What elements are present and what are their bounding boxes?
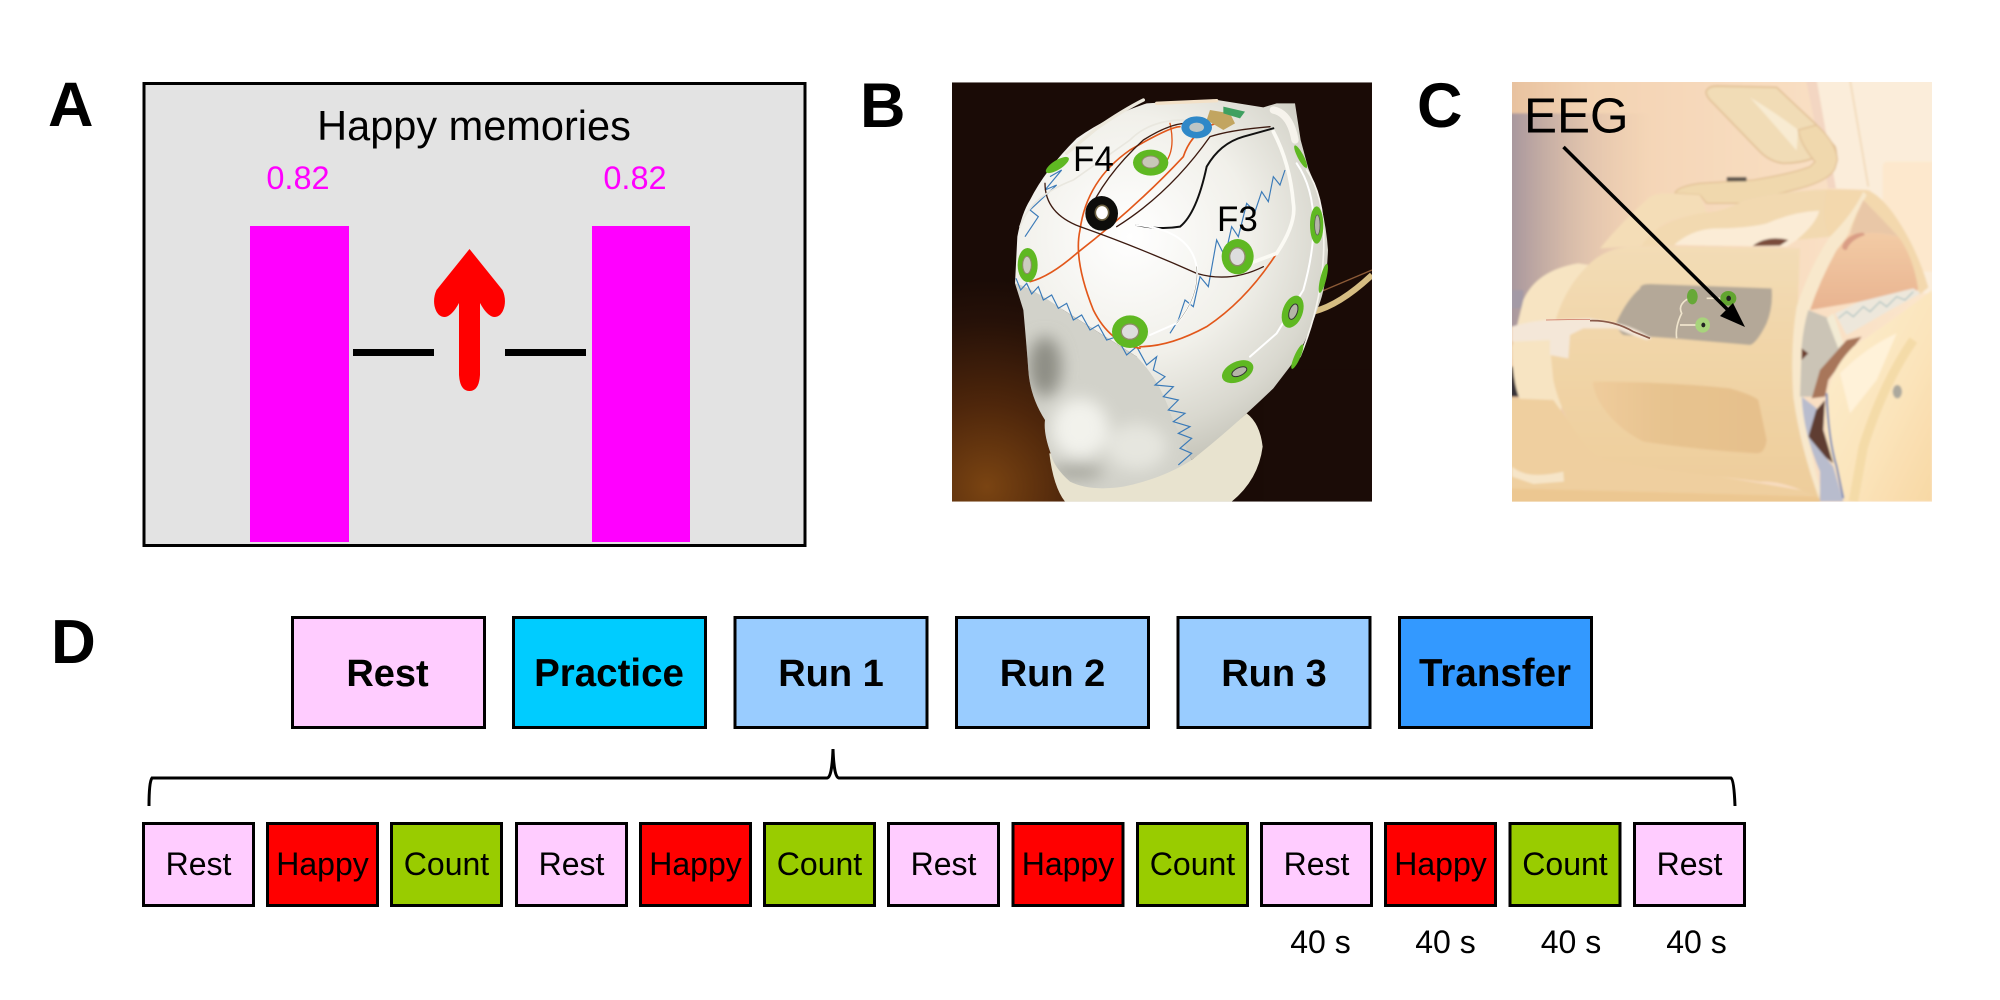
block: Count — [392, 824, 502, 906]
block: Happy — [1013, 824, 1123, 906]
cap — [1015, 99, 1328, 460]
panel C: participant in MR head coil photo illustration — [1500, 80, 1940, 507]
right bar — [592, 226, 690, 542]
eeg wires — [1676, 297, 1723, 338]
box: Rest: Rest — [346, 653, 429, 695]
left baseline dash — [353, 349, 434, 356]
foam stand — [1049, 413, 1263, 502]
box: Run 2 — [956, 618, 1148, 728]
block: Rest — [144, 824, 254, 906]
foam face — [1015, 283, 1192, 488]
blue stitching — [1016, 170, 1285, 465]
gap behind coil — [1673, 211, 1819, 247]
right wall panel — [1883, 162, 1932, 271]
block: Rest — [516, 824, 626, 906]
coil ring inner rim — [1792, 192, 1867, 499]
neck wrap — [1800, 310, 1843, 397]
block: Count: Count — [404, 846, 489, 882]
block: Rest — [888, 824, 998, 906]
duration labels — [1290, 924, 1727, 960]
electrodes — [1018, 116, 1330, 388]
block: Rest: Rest — [1657, 846, 1723, 882]
top connector cluster — [1207, 110, 1235, 130]
block: Count: Count — [1150, 846, 1235, 882]
bore edge strip — [1808, 82, 1834, 188]
blanket spot — [1893, 385, 1902, 398]
cheek highlight — [1107, 423, 1167, 470]
box: Practice: Practice — [534, 652, 684, 695]
electrode: green edge 9 — [1318, 264, 1328, 293]
lips — [1842, 233, 1865, 250]
blanket fold — [1853, 340, 1913, 502]
block: Happy: Happy — [1022, 846, 1114, 882]
block: Happy: Happy — [1394, 846, 1487, 882]
bundled cables — [1313, 275, 1372, 312]
block: Count — [1138, 824, 1248, 906]
lower recess — [1593, 382, 1767, 453]
electrode green 1 — [1687, 289, 1698, 304]
inner coil shadow — [1850, 200, 1898, 237]
upper coil arch — [1600, 193, 1707, 248]
mirror plate — [1706, 86, 1836, 163]
electrode: green edge 10 — [1291, 344, 1304, 369]
box: Run 3: Run 3 — [1221, 653, 1327, 695]
hair — [1808, 400, 1833, 463]
box: Transfer: Transfer — [1419, 652, 1571, 695]
upper window — [1617, 284, 1772, 345]
duration 3: 40 s — [1541, 924, 1601, 960]
left bar — [250, 226, 349, 542]
block: Count — [764, 824, 874, 906]
block: Happy — [268, 824, 378, 906]
electrode green 3 — [1695, 317, 1710, 333]
blue stripe — [1827, 393, 1843, 498]
panel B: EEG cap on foam head photo illustration — [952, 82, 1372, 502]
block: Count: Count — [777, 846, 862, 882]
photo background — [952, 82, 1372, 502]
duration 2: 40 s — [1415, 924, 1476, 960]
electrode: green ring 1 — [1133, 150, 1168, 176]
right value: 0.82 — [603, 160, 667, 196]
wall background — [1500, 80, 1940, 507]
duration 1: 40 s — [1290, 924, 1351, 960]
electrode: green ring 4 — [1222, 239, 1254, 274]
panel A label: A — [48, 70, 94, 140]
arrow: EEG pointer — [1564, 147, 1745, 327]
electrode: green ring 5 — [1112, 315, 1148, 348]
panel B label: B — [860, 71, 906, 141]
electrode: blue — [1181, 116, 1212, 138]
collar band — [1835, 288, 1921, 335]
facial shading — [1028, 337, 1167, 479]
face and chin — [1810, 233, 1918, 310]
electrode: green edge 11 — [1294, 145, 1308, 168]
box: Transfer — [1400, 618, 1592, 728]
block: Happy — [1386, 824, 1496, 906]
left value: 0.82 — [266, 160, 330, 196]
label F4: F4 — [1073, 140, 1114, 179]
cable wrap tape — [1512, 318, 1652, 358]
coil ring front — [1824, 189, 1928, 295]
panel A: happy memories feedback display — [144, 84, 805, 546]
block: Rest: Rest — [166, 846, 232, 882]
mirror arm — [1675, 125, 1837, 203]
box: Run 3 — [1178, 618, 1370, 728]
hair glimpse — [1753, 238, 1788, 246]
right baseline dash — [505, 349, 586, 356]
block: Rest: Rest — [1284, 846, 1350, 882]
panel A heading: Happy memories — [317, 102, 631, 149]
box: Run 1: Run 1 — [778, 653, 884, 695]
block: Happy: Happy — [649, 846, 742, 882]
brace linking Run 1 to its blocks — [149, 749, 1735, 806]
bed — [1510, 398, 1820, 503]
collar stitching — [1838, 292, 1913, 318]
block: Rest — [1262, 824, 1372, 906]
block: Rest: Rest — [539, 846, 605, 882]
rear cylinder — [1512, 263, 1600, 413]
panel A background — [144, 84, 805, 546]
wires — [1020, 100, 1324, 357]
box: Practice — [514, 618, 706, 728]
neck skin — [1812, 337, 1862, 398]
box: Rest — [292, 618, 484, 728]
block: Count — [1510, 824, 1620, 906]
panel D label: D — [51, 608, 96, 677]
electrode: green ring 7 — [1282, 296, 1304, 328]
box: Run 1 — [735, 618, 927, 728]
blanket highlight — [1840, 333, 1897, 413]
electrode: green ring 2 — [1046, 156, 1069, 174]
block: Happy — [640, 824, 750, 906]
eye socket shadow — [1028, 337, 1062, 397]
panel C label: C — [1417, 71, 1462, 141]
run block sequence — [144, 824, 1744, 906]
side handle — [1512, 467, 1564, 484]
right wall — [1817, 80, 1940, 293]
block: Happy: Happy — [276, 846, 369, 882]
electrode: green ring 6 — [1222, 360, 1254, 384]
label F3: F3 — [1217, 200, 1258, 239]
block: Count: Count — [1522, 846, 1608, 882]
box: Run 2: Run 2 — [1000, 653, 1105, 695]
mauve wall shading on the left — [1512, 112, 1614, 328]
electrode: black — [1085, 196, 1118, 231]
nose highlight — [1052, 398, 1108, 458]
under nose shadow — [1050, 464, 1103, 479]
electrode: green ring 8 — [1310, 206, 1323, 244]
electrode green 2 — [1720, 291, 1736, 306]
session sequence — [292, 618, 1592, 728]
mirror knob — [1727, 177, 1747, 181]
label EEG: EEG — [1524, 88, 1629, 144]
bed pad — [1802, 397, 1843, 502]
block: Rest: Rest — [911, 846, 977, 882]
main coil body — [1550, 246, 1819, 498]
block: Rest — [1634, 824, 1744, 906]
duration 4: 40 s — [1666, 924, 1727, 960]
icon: red up arrow — [434, 249, 505, 391]
collar clip — [1827, 313, 1843, 348]
electrode: green ring 3 — [1018, 248, 1038, 282]
dark gap at rear — [1512, 366, 1520, 398]
cable bundle wires — [1590, 321, 1650, 338]
lower right background tone — [1264, 502, 1372, 503]
blanket — [1825, 290, 1932, 502]
